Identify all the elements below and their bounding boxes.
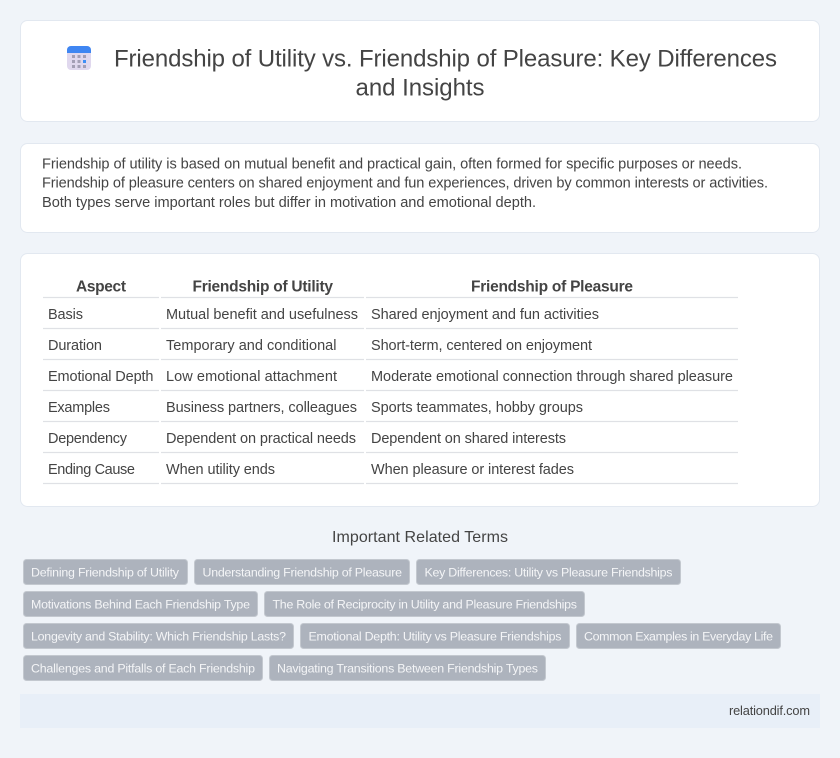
row: basis <box>48 307 599 323</box>
tag: The Role of Reciprocity in Utility and Pleasure Friendships <box>272 598 577 612</box>
title text: Friendship of Utility vs. Friendship of Pleasure: Key Differences <box>114 46 777 72</box>
tag <box>24 624 294 648</box>
row: emotional depth <box>48 369 733 385</box>
title text <box>114 46 777 102</box>
row: duration: Short-term, centered on enjoyment <box>371 338 592 354</box>
tag: Key Differences: Utility vs Pleasure Friendships <box>424 566 672 580</box>
row: basis: Mutual benefit and usefulness <box>166 307 358 323</box>
tag: Emotional Depth: Utility vs Pleasure Friendships <box>308 630 562 644</box>
tag: Longevity and Stability: Which Friendship Lasts? <box>31 630 286 644</box>
panel: title <box>20 20 820 122</box>
row: ending cause <box>48 462 574 478</box>
panel: comparison table <box>20 254 820 506</box>
panel: summary paragraph <box>20 144 820 232</box>
title text: and Insights <box>356 74 484 102</box>
tag <box>24 560 188 584</box>
row: dependency: Dependency <box>48 431 128 447</box>
row: ending cause: When utility ends <box>166 462 275 478</box>
tag <box>264 592 584 616</box>
row: dependency: Dependent on shared interests <box>371 431 566 447</box>
related term tags <box>24 560 780 680</box>
tag <box>24 592 258 616</box>
tag: Challenges and Pitfalls of Each Friendship <box>31 662 255 676</box>
row: dependency: Dependent on practical needs <box>166 431 356 447</box>
tag: Motivations Behind Each Friendship Type <box>31 598 250 612</box>
row: emotional depth: Moderate emotional connection through shared pleasure <box>371 369 733 385</box>
footer: relationdif.com <box>729 703 810 718</box>
tag <box>194 560 410 584</box>
paragraph text: Both types serve important roles but differ in motivation and emotional depth. <box>42 195 536 211</box>
row: dependency <box>48 431 566 447</box>
tag: Navigating Transitions Between Friendship Types <box>277 662 538 676</box>
row: examples: Examples <box>48 400 110 416</box>
table header: Friendship of Pleasure <box>471 278 633 296</box>
row: emotional depth: Emotional Depth <box>48 369 154 385</box>
tag: Common Examples in Everyday Life <box>584 630 773 644</box>
row: duration: Duration <box>48 338 102 354</box>
row: examples: Sports teammates, hobby groups <box>371 400 583 416</box>
table header: Aspect <box>76 278 126 296</box>
tag <box>24 656 262 680</box>
row: ending cause: When pleasure or interest fades <box>371 462 574 478</box>
table header: Friendship of Utility <box>192 278 333 296</box>
row: basis: Basis <box>48 307 83 323</box>
row: examples <box>48 400 583 416</box>
row: examples: Business partners, colleagues <box>166 400 357 416</box>
tag: Understanding Friendship of Pleasure <box>202 566 402 580</box>
tag: Defining Friendship of Utility <box>31 566 180 580</box>
row: duration: Temporary and conditional <box>166 338 336 354</box>
row: basis: Shared enjoyment and fun activities <box>371 307 599 323</box>
icon: calendar <box>67 46 91 70</box>
heading: related terms: Important Related Terms <box>332 529 508 546</box>
footer <box>20 694 820 728</box>
paragraph text: Friendship of utility is based on mutual benefit and practical gain, often formed for specific purposes or needs. <box>42 156 742 172</box>
table header <box>76 278 633 296</box>
row: duration <box>48 338 592 354</box>
row: ending cause: Ending Cause <box>48 462 135 478</box>
paragraph text <box>42 156 768 211</box>
row: emotional depth: Low emotional attachment <box>166 369 337 385</box>
tag <box>416 560 680 584</box>
tag <box>300 624 570 648</box>
tag <box>270 656 546 680</box>
tag <box>576 624 780 648</box>
paragraph text: Friendship of pleasure centers on shared enjoyment and fun experiences, driven by common interests or activities. <box>42 176 768 192</box>
